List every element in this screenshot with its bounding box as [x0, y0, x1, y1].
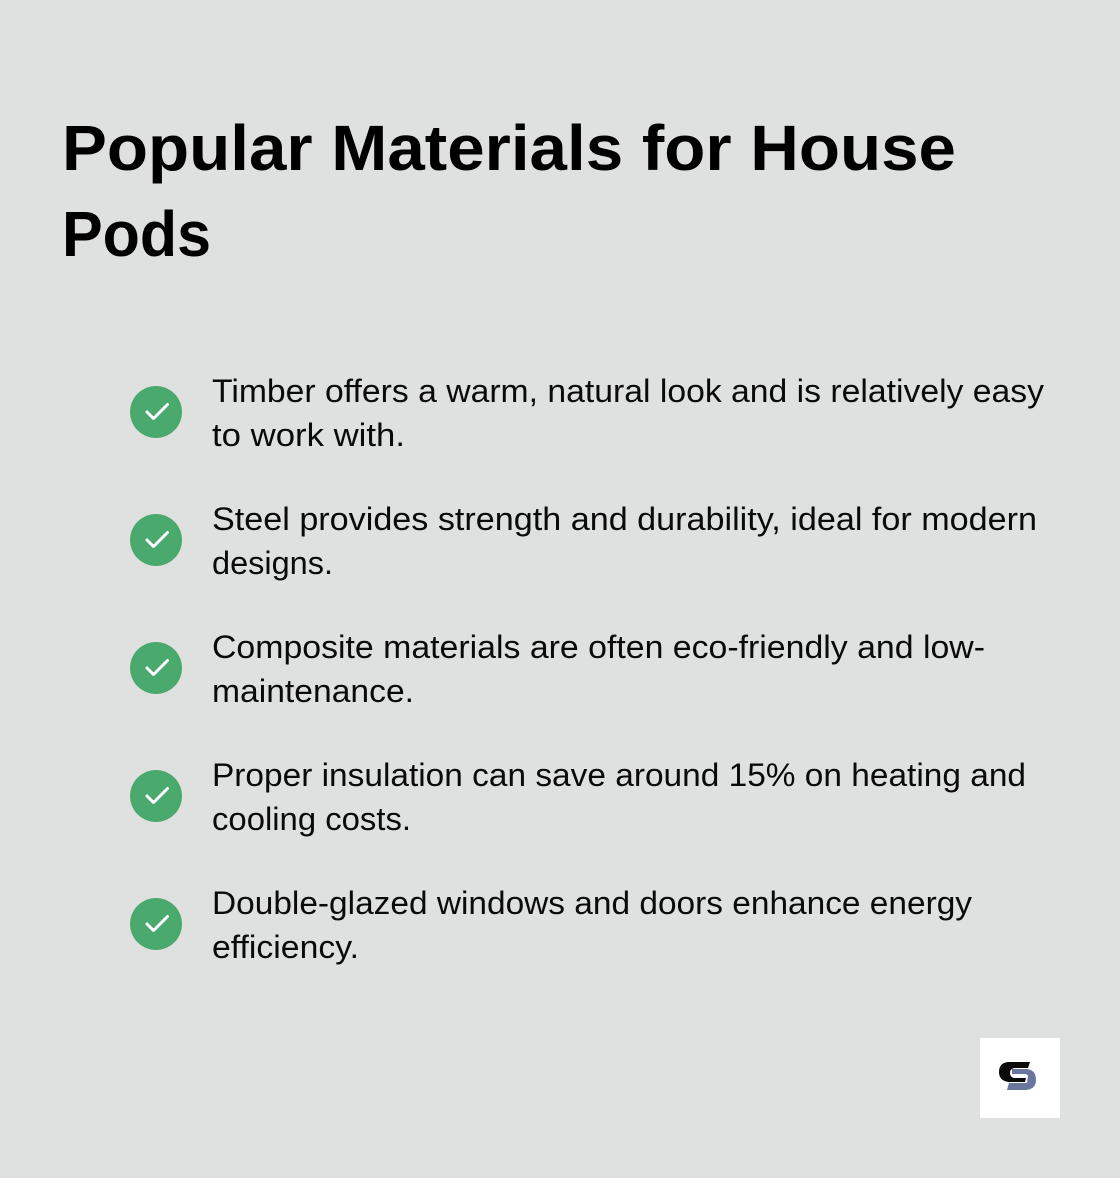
icon: check circle	[130, 642, 182, 694]
text: insulation	[212, 757, 1026, 837]
icon: check circle	[130, 514, 182, 566]
text: timber: Timber offers a warm, natural look and is relatively easy	[212, 373, 1044, 409]
title: Popular Materials for House	[62, 112, 956, 184]
title	[62, 112, 956, 270]
text: composite: maintenance.	[212, 673, 414, 709]
list item: composite	[130, 629, 985, 709]
list item: insulation	[130, 757, 1026, 837]
list item: glazing	[130, 885, 972, 965]
icon: check circle	[130, 770, 182, 822]
text: timber	[212, 373, 1044, 453]
text: glazing: Double-glazed windows and doors enhance energy	[212, 885, 972, 921]
text: glazing	[212, 885, 972, 965]
icon: check circle	[130, 898, 182, 950]
list item: timber	[130, 373, 1044, 453]
text: composite	[212, 629, 985, 709]
text: steel: designs.	[212, 545, 333, 581]
logo badge	[980, 1038, 1060, 1118]
text: insulation: cooling costs.	[212, 801, 411, 837]
text: steel	[212, 501, 1037, 581]
text: insulation: Proper insulation can save around 15% on heating and	[212, 757, 1026, 793]
text: steel: Steel provides strength and durability, ideal for modern	[212, 501, 1037, 537]
text: composite: Composite materials are often eco-friendly and low-	[212, 629, 985, 665]
text: glazing: efficiency.	[212, 929, 359, 965]
text: timber: to work with.	[212, 417, 405, 453]
title: Pods	[62, 198, 211, 270]
logo mark	[999, 1062, 1036, 1090]
list item: steel	[130, 501, 1037, 581]
icon: check circle	[130, 386, 182, 438]
